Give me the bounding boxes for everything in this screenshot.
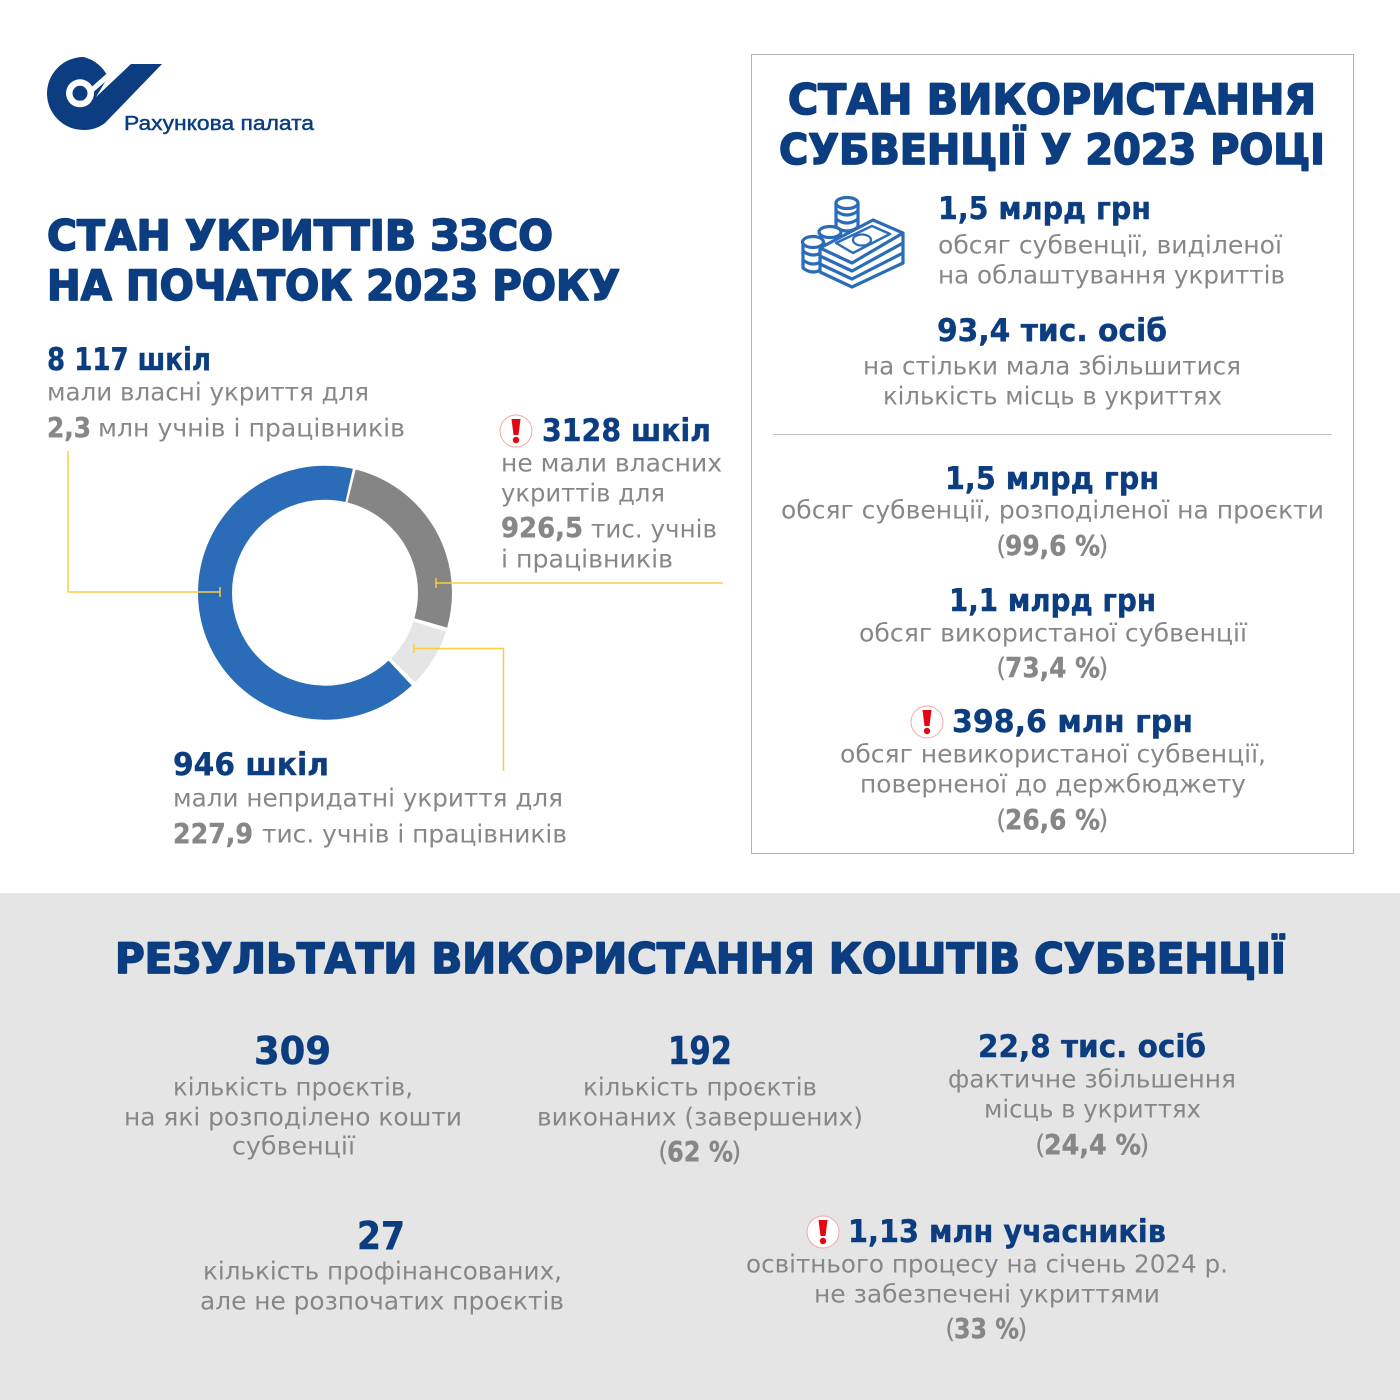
stat: distributed subvention: ( [996, 531, 1007, 562]
text block: schools with own shelters: мали власні укриття для [47, 377, 369, 406]
stat: 22.8 thousand people: 24,4 % [1044, 1128, 1141, 1161]
text block: schools with own shelters: 8 117 шкіл [47, 342, 211, 378]
stat: allocated subvention: на облаштування укриттів [938, 260, 1285, 289]
text block: schools with own shelters: млн учнів і працівників [98, 413, 405, 442]
stat: used subvention: 73,4 % [1005, 651, 1100, 684]
icon: money and coins [802, 198, 903, 287]
text block: schools without shelters: тис. учнів [591, 514, 717, 543]
stat: allocated subvention: обсяг субвенції, виділеної [938, 230, 1283, 259]
text block: schools with unusable shelters [173, 747, 567, 850]
stat: 192 projects: ) [731, 1137, 742, 1168]
stat: 22.8 thousand people: 22,8 тис. осіб [978, 1029, 1206, 1065]
text block: schools without shelters: не мали власних [501, 448, 722, 477]
icon: exclamation mark [911, 706, 943, 738]
stat: distributed subvention [781, 461, 1324, 562]
icon: exclamation mark [500, 415, 532, 447]
heading: results: РЕЗУЛЬТАТИ ВИКОРИСТАННЯ КОШТІВ СУБВЕНЦІЇ [115, 933, 1286, 983]
stat: unused subvention: ) [1098, 805, 1109, 836]
text block: schools without shelters [500, 413, 722, 573]
leader line: unusable shelters [414, 644, 504, 771]
heading: subvention status: СТАН ВИКОРИСТАННЯ [788, 75, 1316, 124]
text block: schools with unusable shelters: мали непридатні укриття для [173, 783, 563, 812]
stat: planned places: на стільки мала збільшитися [863, 351, 1241, 380]
stat: unused subvention: поверненої до держбюджету [860, 769, 1246, 798]
stat: unused subvention: обсяг невикористаної субвенції, [840, 739, 1266, 768]
donut chart [215, 483, 435, 703]
stat: 22.8 thousand people: ) [1139, 1130, 1150, 1161]
stat: 1.13 million participants: ) [1017, 1314, 1028, 1345]
stat: used subvention: 1,1 млрд грн [949, 583, 1156, 619]
stat: planned places: кількість місць в укриттях [883, 381, 1222, 410]
stat: 1.13 million participants: не забезпечені укриттями [814, 1279, 1160, 1308]
stat: 1.13 million participants: освітнього процесу на січень 2024 р. [746, 1249, 1228, 1278]
stat: allocated subvention: 1,5 млрд грн [938, 191, 1151, 227]
stat: unused subvention: 398,6 млн грн [952, 704, 1193, 740]
stat: 1.13 million participants: 33 % [954, 1312, 1019, 1345]
stat: planned places [863, 313, 1241, 410]
stat: 192 projects: 192 [668, 1029, 732, 1073]
stat: 1.13 million participants: ( [945, 1314, 956, 1345]
stat: unused subvention: 26,6 % [1005, 803, 1100, 836]
text block: schools without shelters: укриттів для [501, 478, 665, 507]
stat: planned places: 93,4 тис. осіб [937, 313, 1167, 349]
stat: 309 projects: субвенції [232, 1131, 356, 1160]
stat: 22.8 thousand people: фактичне збільшення [948, 1064, 1236, 1093]
stat: 309 projects: 309 [254, 1029, 331, 1073]
stat: 1.13 million participants [746, 1214, 1228, 1345]
text block: schools with unusable shelters: 946 шкіл [173, 747, 329, 783]
stat: allocated subvention [938, 191, 1285, 289]
logo: Рахункова палата: Рахункова палата [124, 113, 315, 135]
text block: schools with unusable shelters: 227,9 [173, 817, 253, 850]
stat: unused subvention [840, 704, 1266, 836]
stat: 309 projects: кількість проєктів, [173, 1072, 413, 1101]
stat: distributed subvention: 99,6 % [1005, 529, 1100, 562]
stat: 22.8 thousand people: ( [1035, 1130, 1046, 1161]
stat: distributed subvention: ) [1098, 531, 1109, 562]
stat: 192 projects: ( [658, 1137, 669, 1168]
stat: 192 projects [537, 1029, 863, 1168]
text block: schools with unusable shelters: тис. учнів і працівників [262, 819, 567, 848]
heading: subvention status [779, 75, 1325, 174]
text block: schools without shelters: 3128 шкіл [542, 413, 711, 449]
heading: shelter status: НА ПОЧАТОК 2023 РОКУ [47, 261, 620, 310]
stat: used subvention [859, 583, 1248, 684]
stat: 309 projects [124, 1029, 462, 1160]
stat: 22.8 thousand people: місць в укриттях [984, 1094, 1201, 1123]
stat: unused subvention: ( [996, 805, 1007, 836]
text block: schools without shelters: і працівників [501, 544, 673, 573]
stat: used subvention: ) [1098, 653, 1109, 684]
stat: 27 projects: 27 [357, 1214, 405, 1258]
stat: 27 projects: але не розпочатих проєктів [200, 1286, 564, 1315]
stat: used subvention: обсяг використаної субвенції [859, 618, 1248, 647]
logo: Рахункова палата [47, 57, 315, 135]
heading: shelter status: СТАН УКРИТТІВ ЗЗСО [47, 211, 553, 260]
stat: 192 projects: 62 % [667, 1135, 733, 1168]
stat: 309 projects: на які розподілено кошти [124, 1102, 462, 1131]
stat: 192 projects: кількість проєктів [583, 1072, 817, 1101]
stat: 27 projects [200, 1214, 564, 1315]
stat: used subvention: ( [996, 653, 1007, 684]
stat: 22.8 thousand people [948, 1029, 1236, 1161]
stat: distributed subvention: 1,5 млрд грн [945, 461, 1159, 497]
icon: exclamation mark [807, 1216, 839, 1248]
text block: schools with own shelters [47, 342, 405, 444]
heading: subvention status: СУБВЕНЦІЇ У 2023 РОЦІ [779, 124, 1325, 174]
heading: shelter status [47, 211, 620, 310]
stat: 1.13 million participants: 1,13 млн учасників [848, 1214, 1166, 1250]
text block: schools with own shelters: 2,3 [47, 411, 91, 444]
stat: distributed subvention: обсяг субвенції, розподіленої на проєкти [781, 495, 1324, 524]
panel: subvention use in 2023 [752, 54, 1354, 854]
leader line: own shelters [68, 451, 220, 597]
stat: 27 projects: кількість профінансованих, [203, 1256, 562, 1285]
leader line: no shelters [436, 578, 723, 588]
stat: 192 projects: виконаних (завершених) [537, 1102, 863, 1131]
panel: results of using funds [0, 893, 1400, 1400]
text block: schools without shelters: 926,5 [501, 511, 583, 544]
